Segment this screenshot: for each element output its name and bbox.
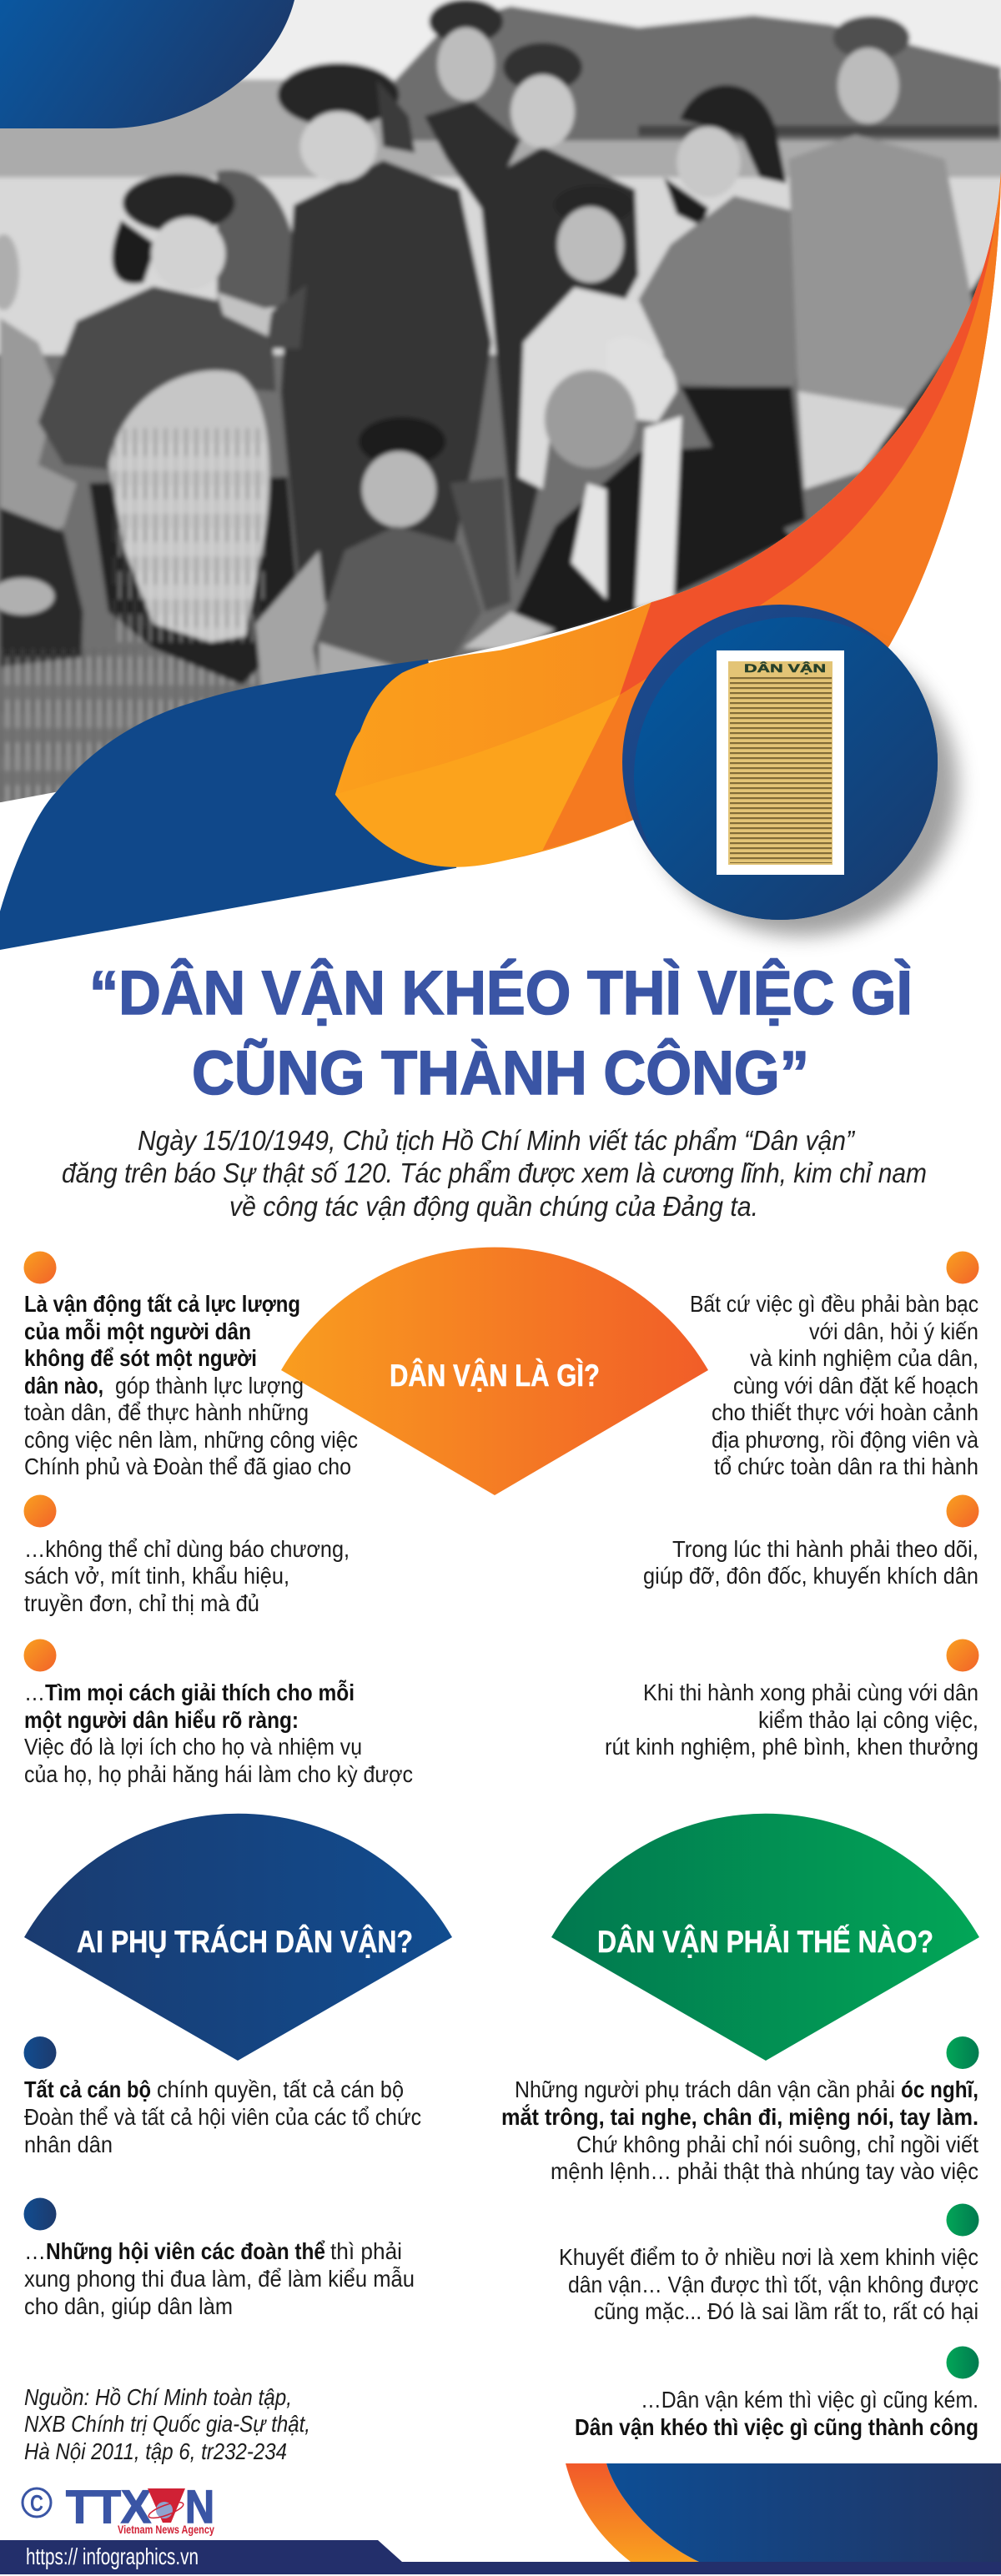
wave: orange shape xyxy=(335,171,1001,867)
right item 1: với dân, hỏi ý kiến xyxy=(809,1318,978,1344)
item 1 xyxy=(23,2036,421,2157)
item 2: … xyxy=(24,2238,46,2264)
right item 2 xyxy=(643,1494,979,1589)
panel: Dân vận phải thế nào xyxy=(501,1814,979,2440)
icon: copyright mark: C xyxy=(30,2490,43,2516)
left item 1: góp thành lực lượng xyxy=(115,1373,304,1398)
right item 1 xyxy=(690,1251,979,1479)
heading fan: Dân vận phải thế nào: DÂN VẬN PHẢI THẾ NÀO? xyxy=(597,1924,933,1959)
left item 3 xyxy=(23,1640,413,1787)
item 2: thì phải xyxy=(330,2238,402,2264)
top-left blue corner shape xyxy=(0,0,294,128)
paper: article text lines xyxy=(730,676,832,863)
right item 1: cho thiết thực với hoàn cảnh xyxy=(712,1399,978,1425)
logo: TTXVN Vietnam News Agency xyxy=(23,2480,214,2536)
paper: white mat xyxy=(717,650,844,875)
left item 3: của họ, họ phải hăng hái làm cho kỳ được xyxy=(24,1761,413,1787)
heading fan: Dân vận là gì: DÂN VẬN LÀ GÌ? xyxy=(390,1358,600,1393)
left item 3: Tìm mọi cách giải thích cho mỗi xyxy=(45,1680,355,1705)
panel: Dân vận là gì xyxy=(23,1248,979,1787)
left item 1: toàn dân, để thực hành những xyxy=(24,1399,309,1425)
bottom-right decorative block xyxy=(566,2463,1001,2562)
item 1: Đoàn thể và tất cả hội viên của các tổ chức xyxy=(24,2104,421,2130)
source note xyxy=(24,2384,310,2464)
left item 2: …không thể chỉ dùng báo chương, xyxy=(24,1536,350,1562)
item 2: Những hội viên các đoàn thể xyxy=(46,2238,325,2264)
paper: yellowed article xyxy=(728,661,832,865)
right item 1: cùng với dân đặt kế hoạch xyxy=(733,1373,978,1398)
left item 1: không để sót một người xyxy=(24,1345,257,1371)
left item 1: của mỗi một người dân xyxy=(24,1318,251,1344)
left item 3: … xyxy=(24,1680,45,1705)
item 3 xyxy=(575,2347,979,2440)
heading fan: Ai phụ trách dân vận: AI PHỤ TRÁCH DÂN VẬN? xyxy=(77,1924,413,1959)
item 2: xung phong thi đua làm, để làm kiểu mẫu xyxy=(24,2266,415,2292)
intro paragraph: về công tác vận động quần chúng của Đảng ta. xyxy=(229,1191,758,1222)
paper: masthead: DÂN VẬN xyxy=(744,660,826,675)
panel: Ai phụ trách dân vận xyxy=(23,1814,452,2319)
item 1: óc nghĩ, xyxy=(901,2076,978,2102)
item 1: Tất cả cán bộ xyxy=(24,2076,151,2102)
icon: copyright mark xyxy=(23,2488,51,2517)
left item 1: dân nào, xyxy=(24,1373,103,1398)
left item 3: một người dân hiểu rõ ràng: xyxy=(24,1707,299,1733)
heading fan: Dân vận phải thế nào xyxy=(551,1814,979,2061)
icon: red V and globe xyxy=(147,2488,185,2523)
hero: photo of Ho Chi Minh with villagers and decorative waves xyxy=(0,0,1001,950)
right item 1: tổ chức toàn dân ra thi hành xyxy=(714,1454,978,1479)
circle: newspaper clipping Dân vận xyxy=(622,605,938,920)
left item 2 xyxy=(23,1494,350,1616)
right item 3 xyxy=(605,1640,979,1760)
item 1: Những người phụ trách dân vận cần phải xyxy=(515,2076,895,2102)
left item 3: Việc đó là lợi ích cho họ và nhiệm vụ xyxy=(24,1734,362,1760)
photo: black and white group portrait xyxy=(0,0,1001,807)
left item 1: Chính phủ và Đoàn thể đã giao cho xyxy=(24,1454,351,1479)
source note: Nguồn: Hồ Chí Minh toàn tập, xyxy=(24,2384,292,2410)
left item 1 xyxy=(23,1251,358,1479)
wordmark: N xyxy=(185,2480,214,2533)
item 2: cho dân, giúp dân làm xyxy=(24,2293,233,2319)
footer bar with URL: https:// infographics.vn xyxy=(26,2543,199,2569)
left item 1: Là vận động tất cả lực lượng xyxy=(24,1291,300,1317)
tagline: Vietnam News Agency xyxy=(118,2523,214,2536)
item 1: chính quyền, tất cả cán bộ xyxy=(157,2076,404,2102)
wave: blue shape xyxy=(0,660,456,950)
heading fan: Ai phụ trách dân vận xyxy=(24,1814,452,2061)
right item 3: kiểm thảo lại công việc, xyxy=(758,1707,978,1733)
footer bar with URL xyxy=(0,2540,1001,2574)
heading fan: Dân vận là gì xyxy=(281,1248,708,1495)
source note: NXB Chính trị Quốc gia-Sự thật, xyxy=(24,2411,310,2437)
source note: Hà Nội 2011, tập 6, tr232-234 xyxy=(24,2438,287,2464)
left item 2: sách vở, mít tinh, khẩu hiệu, xyxy=(24,1563,289,1589)
item 2 xyxy=(23,2198,415,2319)
item 1 xyxy=(501,2036,979,2184)
title: “DÂN VẬN KHÉO THÌ VIỆC GÌ xyxy=(89,958,913,1027)
intro paragraph: đăng trên báo Sự thật số 120. Tác phẩm được xem là cương lĩnh, kim chỉ nam xyxy=(62,1157,927,1188)
title: CŨNG THÀNH CÔNG” xyxy=(192,1038,809,1107)
left item 1: công việc nên làm, những công việc xyxy=(24,1427,358,1453)
wordmark: TTX xyxy=(66,2480,151,2533)
left item 2: truyền đơn, chỉ thị mà đủ xyxy=(24,1590,259,1616)
item 1: nhân dân xyxy=(24,2132,113,2157)
wordmark xyxy=(66,2480,214,2533)
item 2 xyxy=(559,2203,979,2324)
right item 2: Trong lúc thi hành phải theo dõi, xyxy=(672,1536,978,1562)
right item 1: và kinh nghiệm của dân, xyxy=(750,1345,978,1371)
intro paragraph: Ngày 15/10/1949, Chủ tịch Hồ Chí Minh viết tác phẩm “Dân vận” xyxy=(138,1125,856,1156)
icon: shadow under circle xyxy=(645,636,958,936)
title xyxy=(89,958,913,1107)
intro paragraph xyxy=(62,1125,927,1222)
